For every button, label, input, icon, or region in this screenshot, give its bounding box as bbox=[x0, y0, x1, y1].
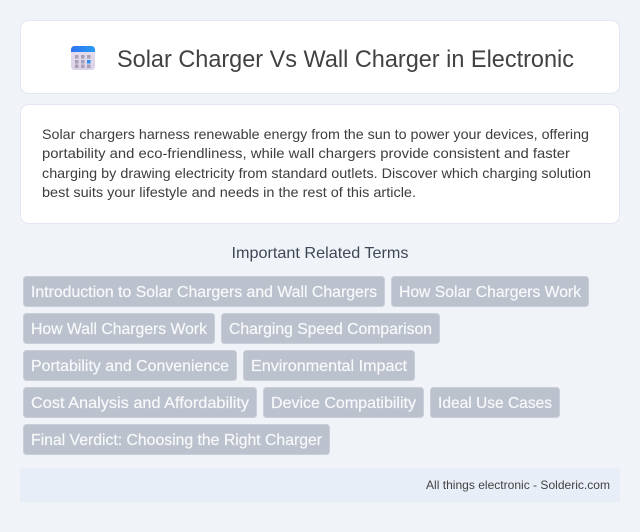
tag: device compatibility: Device Compatibility bbox=[271, 395, 416, 412]
header panel bbox=[20, 20, 620, 94]
tag: final verdict bbox=[24, 424, 330, 454]
tag: charging speed: Charging Speed Comparison bbox=[229, 321, 432, 338]
tag: introduction bbox=[24, 276, 384, 306]
panel: intro paragraph: Solar chargers harness renewable energy from the sun to power your devices, offering bbox=[42, 126, 589, 142]
panel: intro paragraph: charging by drawing electricity from standard outlets. Discover which charging solution bbox=[42, 165, 591, 181]
tag: how solar chargers work: How Solar Chargers Work bbox=[399, 284, 582, 301]
tag: cost analysis bbox=[24, 388, 256, 418]
footer: All things electronic - Solderic.com bbox=[426, 478, 610, 492]
tag: environmental impact: Environmental Impact bbox=[251, 358, 408, 375]
tag: portability: Portability and Convenience bbox=[31, 358, 229, 375]
tag list bbox=[24, 276, 588, 454]
tag: introduction: Introduction to Solar Chargers and Wall Chargers bbox=[31, 284, 377, 301]
panel: intro paragraph: best suits your lifestyle and needs in the rest of this article. bbox=[42, 184, 416, 200]
tag: how wall chargers work: How Wall Chargers Work bbox=[31, 321, 208, 338]
panel: intro paragraph: portability and eco-friendliness, while wall chargers provide consistent and faster bbox=[42, 145, 570, 161]
footer bbox=[20, 468, 620, 502]
tag: charging speed bbox=[222, 314, 440, 344]
tag: ideal use cases bbox=[430, 388, 560, 418]
tag: environmental impact bbox=[244, 350, 414, 380]
tag: how solar chargers work bbox=[392, 276, 588, 306]
heading: related terms: Important Related Terms bbox=[232, 245, 408, 262]
icon: calendar bbox=[71, 46, 95, 70]
tag: final verdict: Final Verdict: Choosing the Right Charger bbox=[31, 432, 323, 449]
tag: portability bbox=[24, 350, 236, 380]
title: Solar Charger Vs Wall Charger in Electronic bbox=[117, 46, 574, 73]
tag: how wall chargers work bbox=[24, 314, 214, 344]
panel: intro paragraph bbox=[20, 104, 620, 224]
tag: device compatibility bbox=[264, 388, 424, 418]
tag: cost analysis: Cost Analysis and Affordability bbox=[31, 395, 249, 412]
tag: ideal use cases: Ideal Use Cases bbox=[438, 395, 552, 412]
